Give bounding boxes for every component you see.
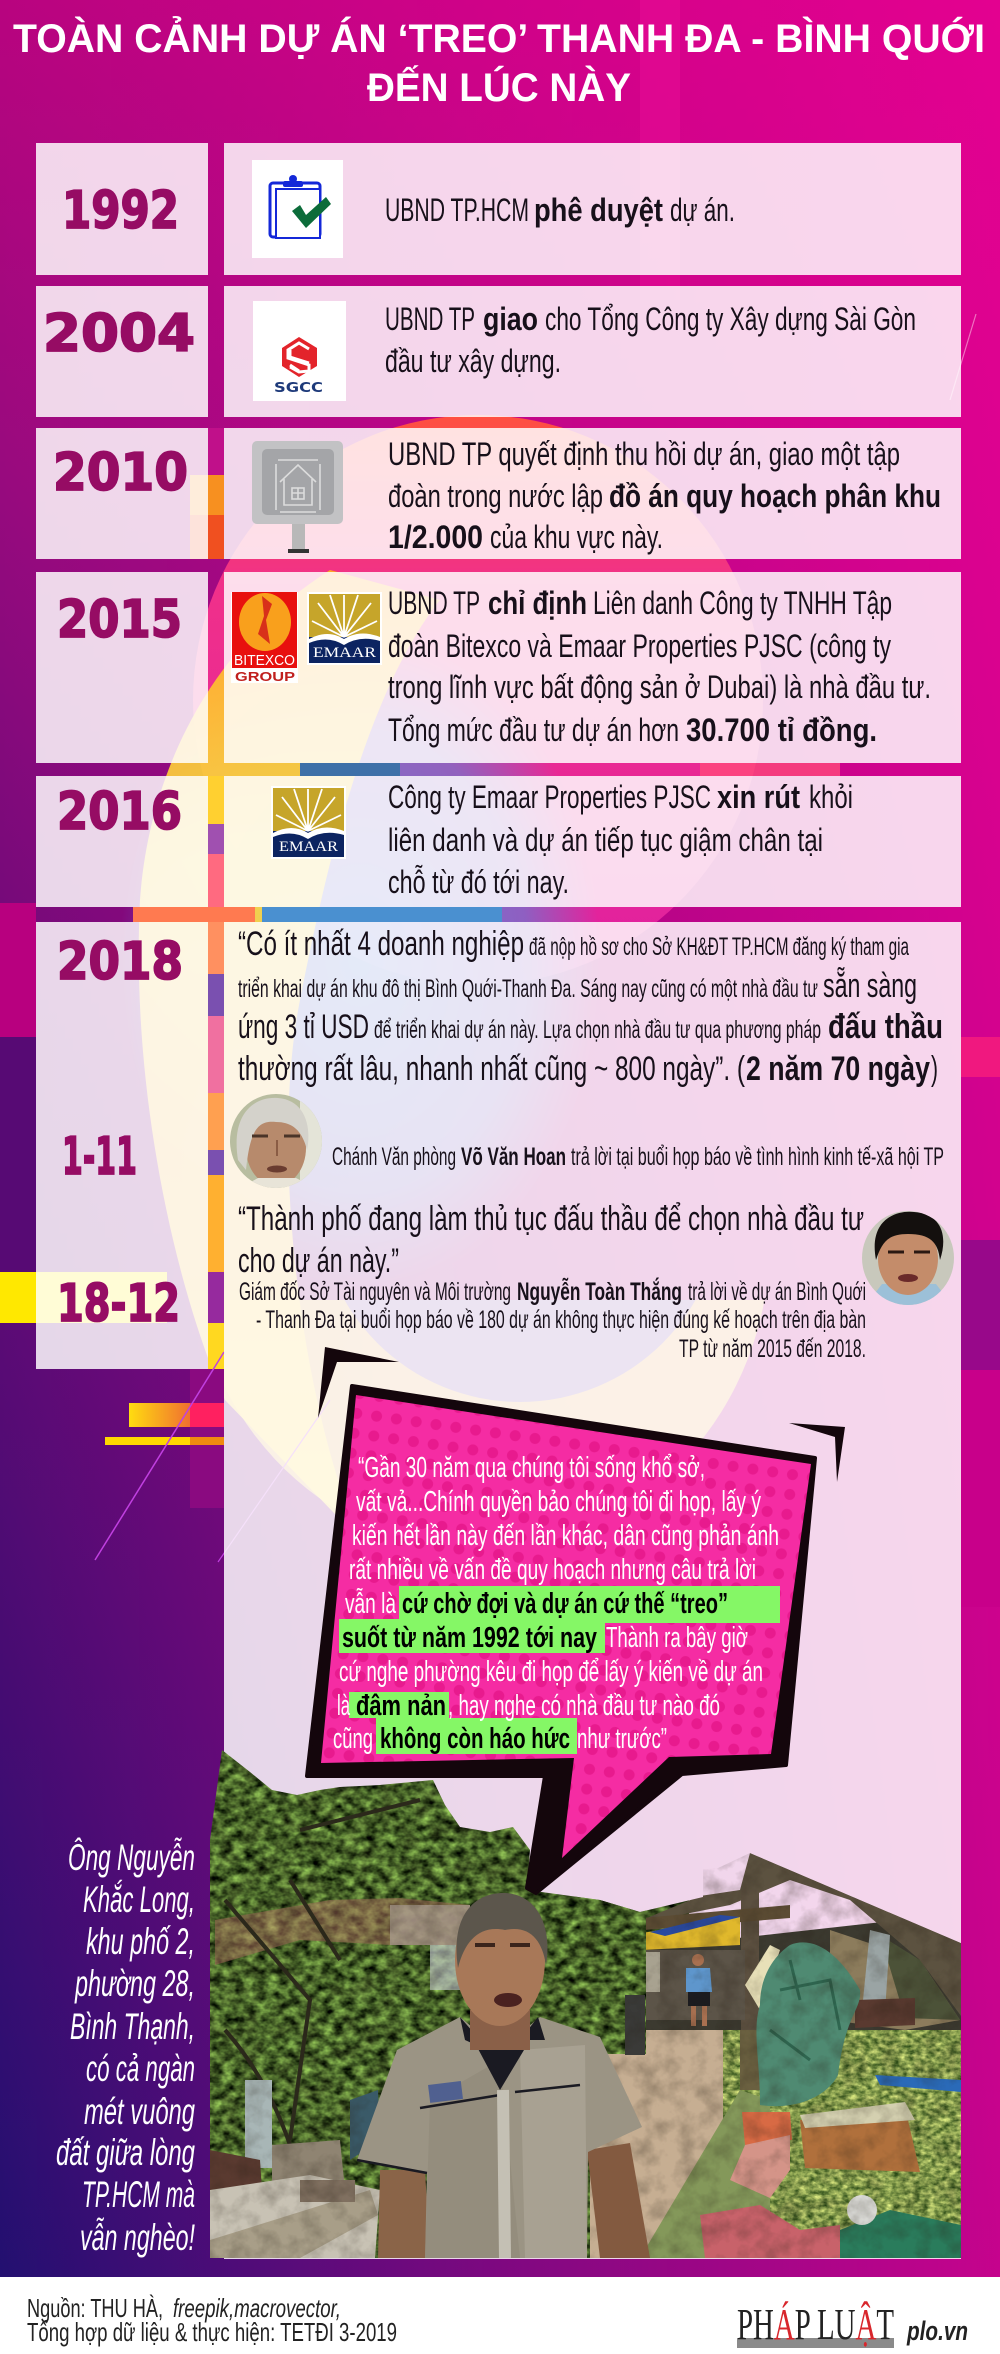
text: 2015: UBND TP [388,585,480,621]
text: 2018 quote: “Có ít nhất 4 doanh nghiệp [238,925,524,963]
bubble quote text: Thành ra bây giờ [606,1622,748,1654]
text: 2018 quote: sẵn sàng [823,967,917,1005]
text: 2018 quote: ứng 3 tỉ USD [238,1008,369,1046]
photo caption [56,1837,195,2258]
text: 2018 quote: ) [931,1050,938,1088]
text: Võ Văn Hoan: Võ Văn Hoan [461,1143,566,1171]
logo: Emaar 2016: EMAAR [279,839,338,855]
years: 1-11 [62,1127,137,1187]
years: 1992 [62,181,179,241]
text: 2015: 30.700 tỉ đồng. [686,712,877,748]
bubble quote text: kiến hết lần này đến lần khác, dân cũng phản ánh [352,1520,779,1552]
years: 18-12 [57,1274,180,1334]
text: 2010: đoàn trong nước lập [388,478,603,514]
years [43,181,195,1334]
portrait: Võ Văn Hoan [230,1094,322,1188]
logo: Bitexco: GROUP [235,669,295,684]
text: city quote: cho dự án này.” [238,1242,399,1280]
source credits [27,2293,397,2347]
text: 2015: Tổng mức đầu tư dự án hơn [388,712,679,748]
photo caption: đất giữa lòng [56,2132,195,2173]
text: 2016: xin rút [717,779,800,815]
text: 2015: chỉ định [488,585,587,621]
bubble quote text: cứ nghe phường kêu đi họp để lấy ý kiến về dự án [339,1656,763,1688]
text: 2004: UBND TP [385,301,475,337]
logo: Emaar 2016 [271,786,346,859]
text: 1992: UBND TP.HCM [385,192,529,228]
bubble quote text: đâm nản [356,1690,446,1722]
text: 1992: phê duyệt [534,192,663,228]
text: 2018 quote: thường rất lâu, nhanh nhất cũng ~ 800 ngày”. ( [238,1050,745,1088]
logo: Bitexco [231,592,298,684]
icon: clipboard check [252,160,343,258]
bubble quote text: suốt từ năm 1992 tới nay [342,1622,597,1654]
text: 1992: dự án. [670,192,735,228]
logo: Pháp Luật: plo.vn [906,2316,968,2346]
bubble quote text: , hay nghe có nhà đầu tư nào đó [448,1690,720,1722]
bubble quote text: như trước” [577,1723,667,1755]
text: 2016: liên danh và dự án tiếp tục giậm chân tại [388,822,823,858]
bubble quote text: cũng [333,1723,373,1755]
source credits: freepik,macrovector, [173,2293,341,2323]
text: Nguyễn Toàn Thắng: TP từ năm 2015 đến 2018. [679,1335,866,1363]
text: 2004: đầu tư xây dựng. [385,343,561,379]
text: 2018 quote: 2 năm 70 ngày [746,1050,930,1088]
logo: Emaar [307,592,382,665]
footer band [0,2277,1000,2354]
text: 1992 [385,192,735,228]
title [13,15,985,110]
bubble quote text [333,1452,779,1755]
bubble quote text: cứ chờ đợi và dự án cứ thế “treo” [402,1588,728,1620]
years: 2016 [57,782,182,842]
bubble highlights [339,1586,780,1754]
text: 2016: chỗ từ đó tới nay. [388,864,569,900]
bubble quote text: là [337,1690,350,1722]
text: 2010 [388,436,941,555]
text: 2004: giao [483,301,538,337]
text: Nguyễn Toàn Thắng: Nguyễn Toàn Thắng [517,1276,682,1306]
source credits: Tổng hợp dữ liệu & thực hiện: TETĐI 3-2019 [27,2317,397,2347]
photo caption: phường 28, [74,1963,195,2004]
bubble quote text: vất vả...Chính quyền bảo chúng tôi đi họp, lấy ý [356,1486,761,1518]
source credits: Nguồn: THU HÀ, [27,2293,163,2323]
photo: resident and hut [200,1745,970,2265]
man [357,1893,650,2258]
bubble quote text: rất nhiều về vấn đề quy hoạch nhưng câu trả lời [349,1554,756,1586]
photo caption: mét vuông [84,2091,195,2132]
icon: SGCC logo: SGCC [274,381,323,396]
text: 2010: 1/2.000 [388,519,483,555]
text: 2015 [388,585,931,748]
title: ĐẾN LÚC NÀY [367,64,631,110]
photo caption: vẫn nghèo! [80,2217,195,2258]
text: 2004 [385,301,916,379]
text: 2016: Công ty Emaar Properties PJSC [388,779,711,815]
text: city quote [238,1200,864,1280]
logo: Pháp Luật: PHÁP LUẬT [737,2300,894,2349]
years: 2015 [57,590,182,650]
text: Nguyễn Toàn Thắng: trả lời về dự án Bình Quới [688,1278,866,1306]
speech bubble [307,1347,845,1893]
years: 2004 [43,304,195,364]
text: 2016: khỏi [809,779,853,815]
photo caption: có cả ngàn [86,2048,195,2089]
title: TOÀN CẢNH DỰ ÁN ‘TREO’ THANH ĐA - BÌNH QUỚI [13,15,985,61]
icon: planning sign [252,441,343,553]
icon: SGCC logo [253,301,346,401]
bubble quote text: không còn háo hức [380,1723,570,1755]
text: Nguyễn Toàn Thắng [239,1276,866,1363]
bubble quote text: vẫn là [345,1587,397,1620]
years: 2010 [53,443,188,503]
photo caption: Khắc Long, [83,1879,195,1920]
years: 2018 [57,932,183,992]
photo caption: Ông Nguyễn [68,1837,195,1878]
text: Võ Văn Hoan [332,1143,944,1171]
logo: Emaar: EMAAR [313,645,376,661]
logo: Bitexco: BITEXCO [234,652,295,669]
text: Nguyễn Toàn Thắng: Giám đốc Sở Tài nguyên và Môi trường [239,1278,511,1306]
bubble quote text: “Gần 30 năm qua chúng tôi sống khổ sở, [358,1452,705,1484]
text: Võ Văn Hoan: Chánh Văn phòng [332,1143,456,1171]
text: 2018 quote [238,925,943,1088]
text: 2018 quote: đấu thầu [828,1008,943,1046]
text: 2016 [388,779,853,900]
portrait: Nguyễn Toàn Thắng [862,1211,954,1305]
photo caption: Bình Thạnh, [70,2006,195,2047]
text: 2010: của khu vực này. [490,519,663,555]
photo caption: TP.HCM mà [82,2174,195,2215]
photo caption: khu phố 2, [86,1921,195,1962]
